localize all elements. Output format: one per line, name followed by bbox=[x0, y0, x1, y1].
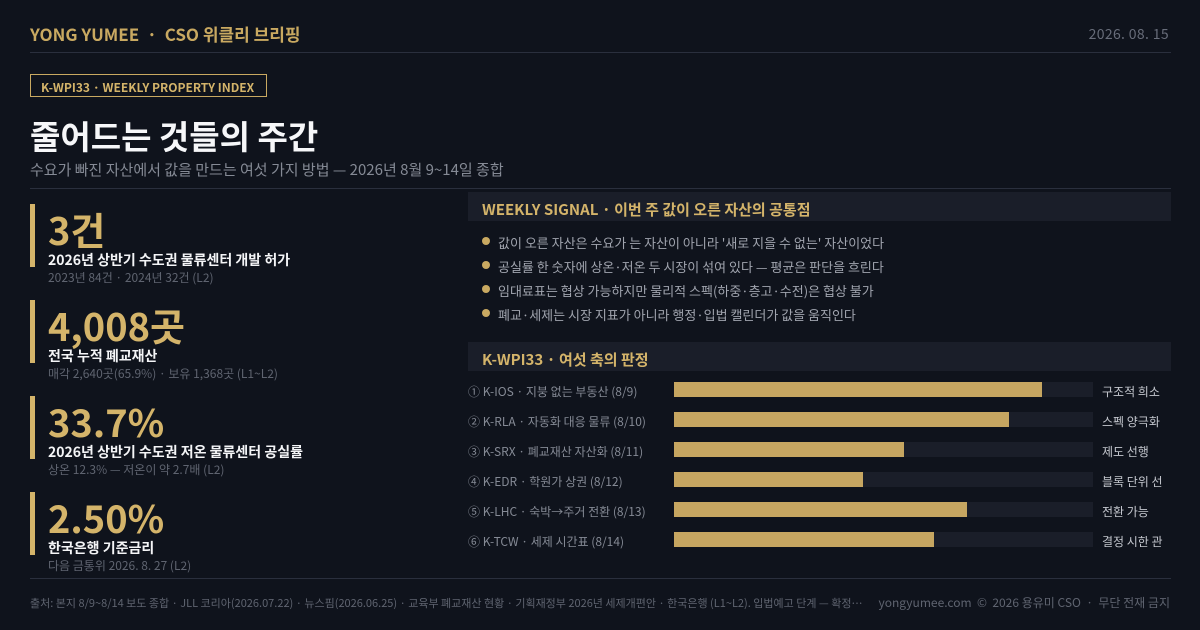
subtitle: 수요가 빠진 자산에서 값을 만드는 여섯 가지 방법 — 2026년 8월 9~14일 종합 bbox=[30, 159, 504, 180]
row 5 bar bbox=[674, 502, 1093, 517]
title: 줄어드는 것들의 주간 bbox=[30, 111, 318, 159]
row 5 label: ⑤ K-LHC · 숙박→주거 전환 (8/13) bbox=[468, 503, 646, 520]
row 3 label: ③ K-SRX · 폐교재산 자산화 (8/11) bbox=[468, 443, 643, 460]
stat: closed schools: 매각 2,640곳(65.9%) · 보유 1,368곳 (L1~L2) bbox=[48, 365, 278, 382]
panel heading: six axes: K-WPI33 · 여섯 축의 판정 bbox=[482, 349, 649, 370]
stat: vacancy: 33.7% bbox=[48, 393, 164, 448]
row 6 label: ⑥ K-TCW · 세제 시간표 (8/14) bbox=[468, 533, 624, 550]
index tag bbox=[30, 74, 267, 97]
header brand: YONG YUMEE · CSO 위클리 브리핑 bbox=[30, 21, 301, 46]
stat: closed schools bbox=[30, 297, 278, 382]
stat: permits: 2026년 상반기 수도권 물류센터 개발 허가 bbox=[48, 250, 290, 270]
signal bullets bbox=[482, 233, 884, 324]
panel heading: weekly signal bbox=[468, 192, 1171, 221]
signal bullets: 임대료표는 협상 가능하지만 물리적 스펙(하중·층고·수전)은 협상 불가 bbox=[498, 281, 874, 300]
row 4 verdict: 블록 단위 선 bbox=[1102, 473, 1163, 490]
stat: vacancy bbox=[30, 393, 303, 478]
stat: closed schools: 전국 누적 폐교재산 bbox=[48, 346, 157, 366]
stat: closed schools: 4,008곳 bbox=[48, 297, 185, 352]
stat: base rate: 다음 금통위 2026. 8. 27 (L2) bbox=[48, 557, 191, 574]
footer copyright: yongyumee.com © 2026 용유미 CSO · 무단 전재 금지 bbox=[879, 594, 1170, 611]
row 5 verdict: 전환 가능 bbox=[1102, 503, 1149, 520]
signal bullets: 폐교·세제는 시장 지표가 아니라 행정·입법 캘린더가 값을 움직인다 bbox=[498, 305, 856, 324]
row 1 bar bbox=[674, 382, 1093, 397]
row 1 verdict: 구조적 희소 bbox=[1102, 383, 1160, 400]
row 6 verdict: 결정 시한 관 bbox=[1102, 533, 1163, 550]
panel heading: weekly signal: WEEKLY SIGNAL · 이번 주 값이 오른 자산의 공통점 bbox=[482, 199, 811, 220]
stat: permits: 3건 bbox=[48, 201, 105, 256]
header date: 2026. 08. 15 bbox=[1089, 24, 1169, 44]
row 6 bar bbox=[674, 532, 1093, 547]
row 2 label: ② K-RLA · 자동화 대응 물류 (8/10) bbox=[468, 413, 646, 430]
signal bullets: 값이 오른 자산은 수요가 는 자산이 아니라 '새로 지을 수 없는' 자산이었다 bbox=[498, 233, 884, 252]
index tag: K-WPI33 · WEEKLY PROPERTY INDEX bbox=[41, 79, 254, 96]
panel heading: six axes bbox=[468, 342, 1171, 371]
row 1 label: ① K-IOS · 지붕 없는 부동산 (8/9) bbox=[468, 383, 637, 400]
row 4 bar bbox=[674, 472, 1093, 487]
stat: base rate: 2.50% bbox=[48, 489, 164, 544]
stat: vacancy: 상온 12.3% — 저온이 약 2.7배 (L2) bbox=[48, 461, 224, 478]
row 2 verdict: 스펙 양극화 bbox=[1102, 413, 1160, 430]
row 2 bar bbox=[674, 412, 1093, 427]
signal bullets: 공실률 한 숫자에 상온·저온 두 시장이 섞여 있다 — 평균은 판단을 흐린다 bbox=[498, 257, 884, 276]
footer sources: 출처: 본지 8/9~8/14 보도 종합 · JLL 코리아(2026.07.22) · 뉴스핌(2026.06.25) · 교육부 폐교재산 현황 · 기획재정부 2026년 세제개편안 · 한국은행 (L1~L2). 입법예고 단계 — 확정⋯ bbox=[30, 595, 862, 611]
stat: permits: 2023년 84건 · 2024년 32건 (L2) bbox=[48, 269, 214, 286]
stat: permits bbox=[30, 201, 290, 286]
stat: base rate: 한국은행 기준금리 bbox=[48, 538, 154, 558]
row 4 label: ④ K-EDR · 학원가 상권 (8/12) bbox=[468, 473, 623, 490]
stat: base rate bbox=[30, 489, 191, 574]
row 3 bar bbox=[674, 442, 1093, 457]
row 3 verdict: 제도 선행 bbox=[1102, 443, 1149, 460]
stat: vacancy: 2026년 상반기 수도권 저온 물류센터 공실률 bbox=[48, 442, 303, 462]
